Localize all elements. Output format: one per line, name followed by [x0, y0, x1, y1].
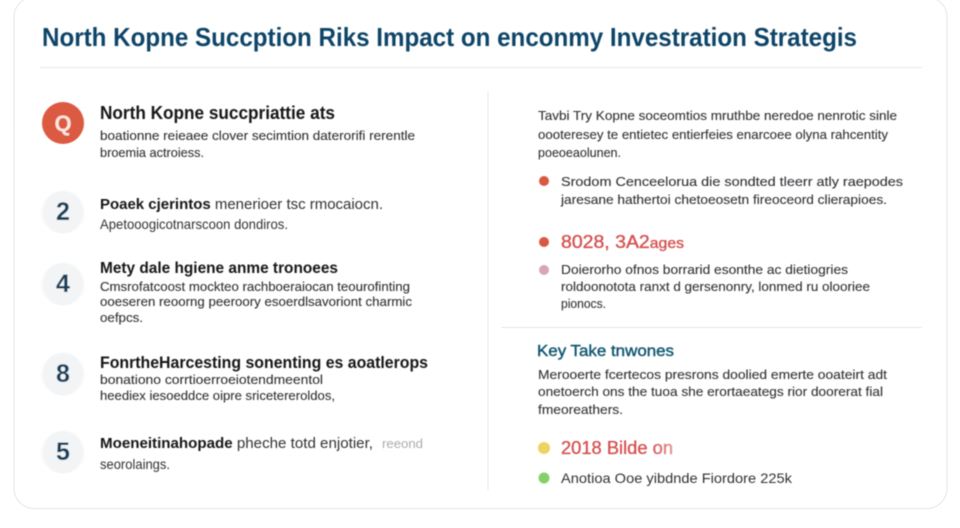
step 5 heading: Moeneitinahopade pheche totd enjotier, — [100, 435, 373, 452]
step 1 text: boationne reieaee clover secimtion daterorifi rerentle — [100, 128, 415, 143]
icon: number 4: 4 — [56, 270, 70, 298]
intro paragraph: oooteresey te entietec entierfeies enarcoee olyna rahcentity — [538, 127, 889, 142]
step 5 — [43, 431, 423, 472]
step 2 text: Apetooogicotnarscoon dondiros. — [100, 216, 288, 232]
step 4 text: heediex iesoeddce oipre sricetereroldos, — [100, 388, 335, 403]
bullet text — [561, 262, 870, 311]
step 1 text — [100, 128, 415, 160]
step 3 heading: Mety dale hgiene anme tronoees — [100, 260, 338, 277]
heading: key takeaways: Key Take tnwones — [537, 343, 674, 360]
icon: number 8 — [43, 353, 83, 393]
title: North Kopne Succption Riks Impact on enconmy Investration Strategis — [42, 22, 857, 52]
icon: number 5: 5 — [56, 438, 70, 466]
bullet: red stat — [539, 237, 549, 247]
bullet: yellow — [538, 442, 550, 454]
bullet: pink — [539, 265, 549, 275]
bullet text: Doierorho ofnos borrarid esonthe ac dietiogries — [561, 262, 849, 277]
bullet text: jaresane hathertoi chetoeosetn fireoceord clierapioes. — [560, 192, 887, 207]
icon: number 2: 2 — [56, 198, 70, 226]
step 3 — [43, 260, 413, 325]
key takeaways paragraph: Merooerte fcertecos presrons doolied emerte ooateirt adt — [538, 367, 887, 382]
bullet text — [560, 174, 904, 207]
step 4 text — [100, 372, 335, 403]
step 4 text: bonationo corrtioerroeiotendmeentol — [100, 372, 323, 387]
intro paragraph: Tavbi Try Kopne soceomtios mruthbe neredoe nenrotic sinle — [538, 108, 897, 123]
icon: red badge — [42, 102, 84, 144]
step 4 — [43, 353, 428, 403]
icon: number 8: 8 — [56, 360, 70, 388]
step 1 — [42, 102, 415, 160]
step 3 text: oefpcs. — [100, 310, 143, 325]
bullet: red — [539, 176, 549, 186]
icon: number 2 — [43, 191, 83, 231]
bullet text: Anotioa Ooe yibdnde Fiordore 225k — [561, 470, 793, 486]
bullet text: pionocs. — [561, 296, 606, 311]
intro paragraph — [538, 108, 897, 160]
icon: red badge: Q — [54, 111, 72, 136]
stat figure: 8028, 3A2 ages — [561, 231, 684, 252]
step 2 heading: Poaek cjerintos menerioer tsc rmocaiocn. — [100, 196, 383, 213]
step 3 text: Cmsrofatcoost mockteo rachboeraiocan teourofinting — [100, 279, 410, 294]
step 3 text — [100, 279, 413, 325]
step 5 faded word: reeond — [382, 436, 423, 451]
intro paragraph: poeoeaolunen. — [538, 145, 621, 160]
step 2 — [43, 191, 383, 232]
key takeaways paragraph — [538, 367, 887, 417]
bullet text: roldoonotota ranxt d gersenonry, lonmed ru olooriee — [561, 279, 870, 294]
step 4 heading: FonrtheHarcesting sonenting es aoatlerops — [100, 354, 428, 372]
step 3 text: ooeseren reoorng peeroory esoerdlsavoriont charmic — [100, 294, 413, 309]
stat figure: 2018 Bilde on — [561, 438, 673, 458]
icon: number 5 — [43, 431, 83, 471]
step 5 text: seorolaings. — [100, 456, 170, 472]
panel: left column steps — [42, 102, 428, 472]
bullet text: Srodom Cenceelorua die sondted tleerr atly raepodes — [561, 174, 904, 189]
step 1 heading: North Kopne succpriattie ats — [100, 103, 335, 123]
panel: right column — [537, 108, 904, 486]
key takeaways paragraph: onetoerch ons the tuoa she erortaeategs rior doorerat fial — [538, 384, 883, 399]
step 1 text: broemia actroiess. — [100, 145, 204, 160]
bullet: green — [538, 472, 550, 484]
icon: number 4 — [43, 263, 83, 303]
key takeaways paragraph: fmeoreathers. — [538, 402, 623, 417]
